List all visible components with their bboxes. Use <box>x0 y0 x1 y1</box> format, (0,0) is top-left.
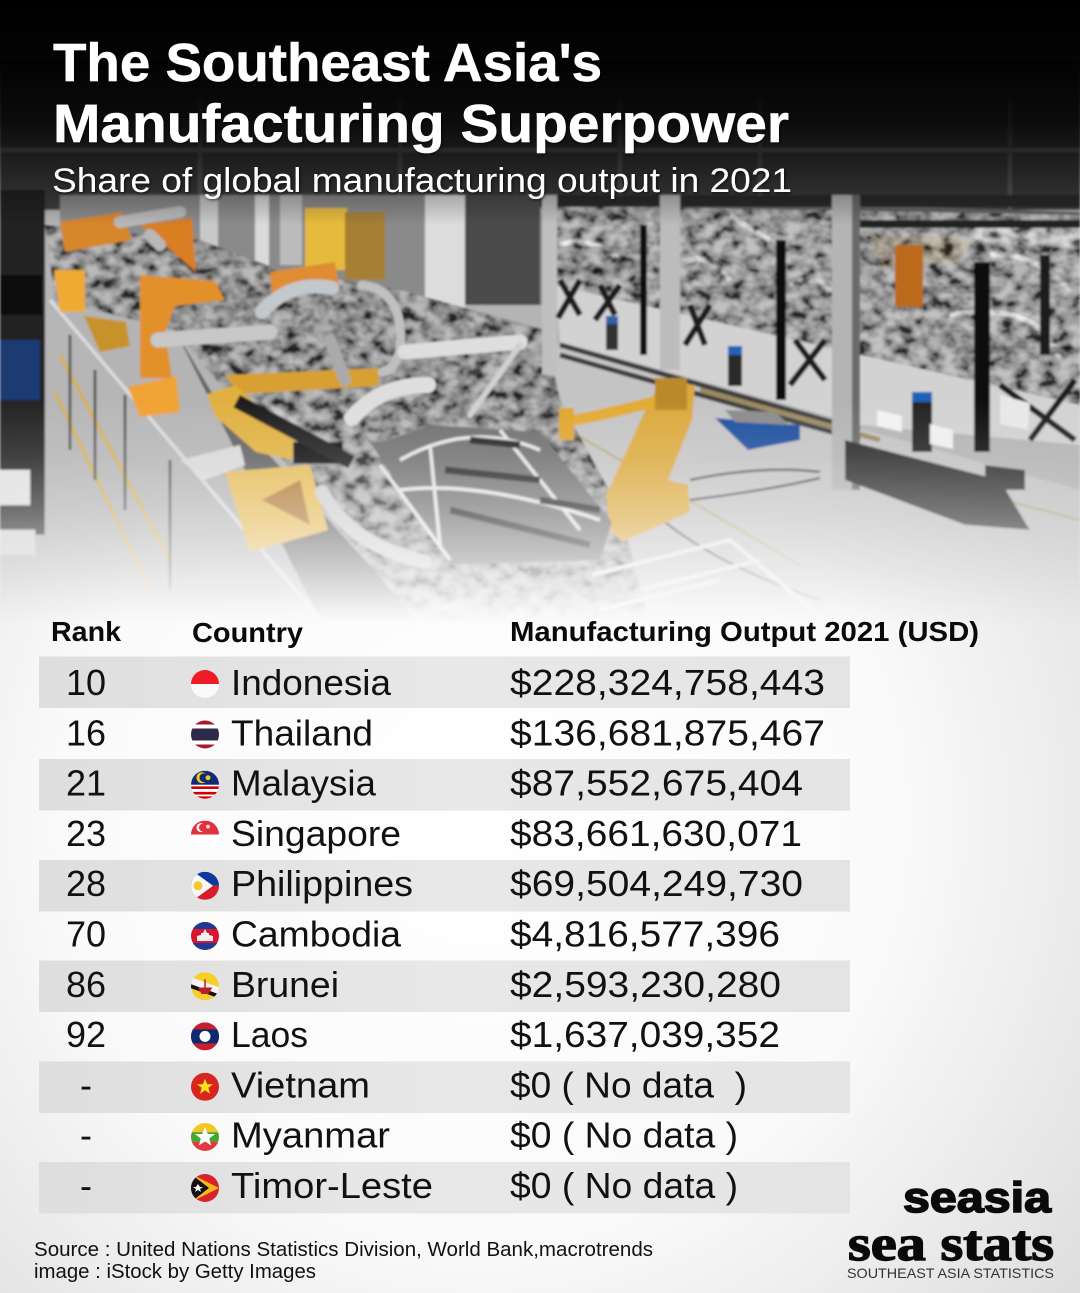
row: Malaysia <box>68 768 802 803</box>
table header: Manufacturing Output 2021 (USD) <box>510 616 979 647</box>
row: Malaysia: $87,552,675,404 <box>510 763 803 804</box>
row: Myanmar <box>82 1120 736 1155</box>
source note <box>34 1239 653 1283</box>
row: Malaysia: 21 <box>66 763 106 804</box>
row: Timor-Leste: $0 ( No data ) <box>510 1165 738 1206</box>
row: Cambodia <box>68 920 778 952</box>
bollards, monitors and equipment <box>606 316 1030 600</box>
row: Singapore: $83,661,630,071 <box>510 813 802 854</box>
flag: Philippines <box>191 872 219 900</box>
right yellow robot arm <box>559 378 695 542</box>
row: Brunei: Brunei <box>231 964 339 1005</box>
row: Thailand: Thailand <box>231 712 373 753</box>
logo: seasia sea stats: sea stats <box>848 1215 1054 1271</box>
row: Singapore: 23 <box>66 813 106 854</box>
flag: Singapore <box>191 820 219 834</box>
row: Timor-Leste: - <box>80 1165 92 1206</box>
logo: seasia sea stats <box>847 1174 1054 1281</box>
row: Vietnam: - <box>80 1064 92 1105</box>
row: Cambodia: $4,816,577,396 <box>510 914 780 954</box>
car body on the line <box>372 424 793 607</box>
table header: Country <box>192 617 303 648</box>
flag: Brunei <box>191 972 219 1000</box>
row: Thailand: $136,681,875,467 <box>510 712 825 753</box>
flag: Myanmar <box>191 1123 219 1151</box>
row: Indonesia: 10 <box>66 662 106 703</box>
flag: Malaysia <box>191 771 219 799</box>
table header: Rank <box>51 616 121 647</box>
flag: Thailand <box>191 720 219 748</box>
logo: seasia sea stats: SOUTHEAST ASIA STATISTICS <box>847 1265 1054 1281</box>
row: Vietnam: $0 ( No data ) <box>510 1064 747 1105</box>
table header <box>51 616 979 648</box>
logo: seasia sea stats: seasia <box>903 1174 1052 1222</box>
flag: Indonesia <box>191 670 219 698</box>
row: Philippines: $69,504,249,730 <box>510 863 803 904</box>
row: Vietnam <box>82 1070 745 1105</box>
row: Vietnam: Vietnam <box>231 1064 370 1105</box>
title: Manufacturing Superpower <box>53 94 789 154</box>
row: Laos <box>68 1020 778 1052</box>
photographic texture <box>44 205 1080 608</box>
flag: Cambodia <box>191 922 219 950</box>
row: Malaysia: Malaysia <box>231 763 377 804</box>
row: Indonesia: $228,324,758,443 <box>510 662 825 703</box>
row: Brunei: $2,593,230,280 <box>510 964 781 1005</box>
row: Timor-Leste: Timor-Leste <box>231 1165 433 1206</box>
title: The Southeast Asia's <box>53 33 602 93</box>
source note: image : iStock by Getty Images <box>34 1261 316 1283</box>
row: Cambodia: Cambodia <box>231 914 402 954</box>
row: Myanmar: Myanmar <box>231 1115 390 1156</box>
row: Philippines: 28 <box>66 863 106 904</box>
left storage racks and floor <box>0 190 172 590</box>
row: Philippines: Philippines <box>231 863 413 904</box>
top black gradient overlay <box>0 0 1080 225</box>
source note: Source : United Nations Statistics Division, World Bank,macrotrends <box>34 1239 653 1261</box>
row stripes <box>39 656 850 1214</box>
back wall and yellow generator <box>58 193 543 308</box>
subtitle: Share of global manufacturing output in 2021 <box>52 162 792 200</box>
flag: Timor-Leste <box>191 1174 219 1202</box>
row: Singapore: Singapore <box>231 813 401 854</box>
row: Indonesia <box>68 668 824 700</box>
aisle floor and track <box>555 284 1080 564</box>
row: Indonesia: Indonesia <box>231 662 392 703</box>
row: Singapore <box>68 819 800 854</box>
row: Brunei: 86 <box>66 964 106 1005</box>
row: Laos: 92 <box>66 1014 106 1055</box>
row: Thailand <box>68 718 823 750</box>
orange welding robots <box>54 212 380 552</box>
central machinery zone <box>45 225 650 625</box>
ceiling and beams <box>0 74 1080 212</box>
flag: Laos <box>191 1022 219 1050</box>
row: Myanmar: $0 ( No data ) <box>510 1115 738 1156</box>
table <box>39 616 979 1214</box>
row: Myanmar: - <box>80 1115 92 1156</box>
row: Laos: $1,637,039,352 <box>510 1014 780 1055</box>
conveyor rail <box>48 298 288 580</box>
row: Cambodia: 70 <box>66 914 106 954</box>
silver robot arms <box>120 212 520 562</box>
factory photo: robotic car assembly line <box>0 68 1080 616</box>
row: Brunei <box>68 970 780 1002</box>
row: Timor-Leste <box>82 1171 736 1206</box>
row: Laos: Laos <box>231 1014 308 1055</box>
columns and black posts <box>540 195 1080 490</box>
flag: Vietnam <box>191 1073 219 1101</box>
row: Philippines <box>68 869 802 904</box>
row: Thailand: 16 <box>66 712 106 753</box>
background car rows <box>540 195 1080 410</box>
title <box>53 33 789 154</box>
